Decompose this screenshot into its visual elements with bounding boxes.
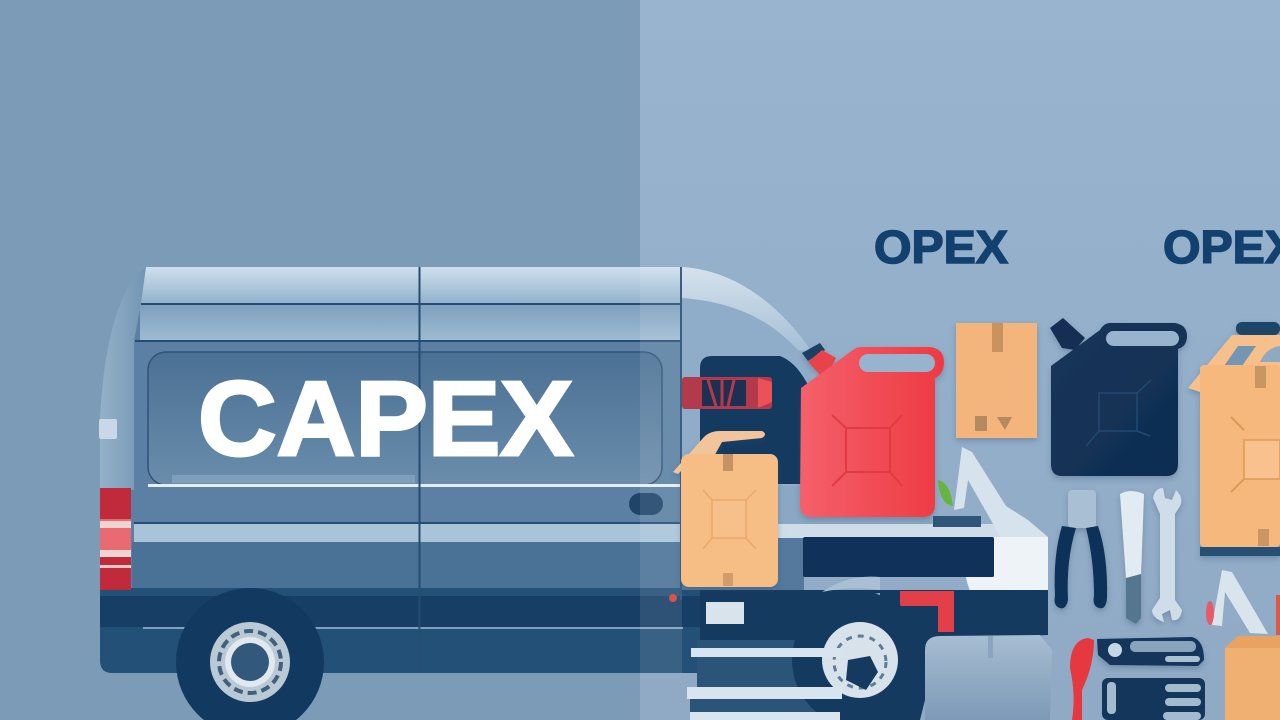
- van side window: [148, 352, 662, 485]
- van illustration: [99, 267, 1048, 720]
- white hood panel: [966, 537, 1048, 598]
- side mirror glitch: [682, 377, 772, 409]
- window chrome strip: [148, 484, 682, 487]
- window sill highlight: [172, 475, 415, 483]
- dark bumper: [803, 537, 994, 577]
- cab lower panel: [682, 538, 804, 590]
- van roof band: [141, 267, 680, 303]
- small marker: [669, 594, 677, 602]
- red front light: [900, 591, 954, 632]
- tool bars: [687, 648, 842, 720]
- bracket block: [706, 602, 744, 624]
- icon: dark folding knife: [1097, 637, 1204, 666]
- van sill: [100, 588, 700, 673]
- icon: folding tool right: [1206, 570, 1268, 634]
- van upper band: [140, 305, 680, 341]
- van light side stripe: [134, 524, 694, 542]
- lower front shadow area: [697, 640, 840, 692]
- green leaf: [938, 480, 953, 506]
- rear wheel: [176, 588, 324, 720]
- panel lines: [134, 267, 681, 672]
- van rear pillar: [100, 267, 146, 490]
- fender arc: [837, 593, 880, 617]
- icon: grey box: [925, 635, 1052, 720]
- panel: right OPEX background: [640, 0, 1280, 720]
- cab panel with roof curve: [682, 267, 812, 524]
- front wheel: [792, 592, 928, 720]
- cab window: [700, 356, 808, 484]
- icon: pliers: [1055, 490, 1107, 608]
- van rear body: [100, 267, 682, 673]
- icon: orange jerry can small: [673, 431, 778, 587]
- front fender highlight: [822, 577, 880, 592]
- cab roof highlight: [682, 267, 812, 352]
- sill dark band: [100, 596, 700, 627]
- panel: left CAPEX background: [0, 0, 640, 720]
- cab lower body: [682, 486, 932, 524]
- icon: navy jerry can: [1050, 318, 1187, 476]
- icon: orange box bottom right: [1225, 595, 1280, 720]
- icon: red tool handle: [1070, 638, 1094, 720]
- light sill: [682, 524, 1002, 538]
- icon: utility knife: [1120, 491, 1144, 624]
- dark lower front: [700, 590, 1048, 720]
- tail light: [100, 488, 131, 590]
- icon: cardboard box: [956, 323, 1037, 438]
- lighter overlay on van right half: [640, 267, 682, 673]
- sill light line: [143, 627, 683, 629]
- heading: OPEX first: OPEX: [874, 221, 1008, 273]
- van lower panel: [132, 542, 682, 588]
- door handle: [629, 493, 663, 515]
- CAPEX label on van: CAPEX: [198, 360, 573, 478]
- rear door hinge: [99, 419, 117, 439]
- icon: wrench: [1152, 488, 1182, 622]
- lower front shadow strip: [690, 699, 840, 712]
- dark step at bracket foot: [933, 516, 981, 527]
- icon: large orange jerry can: [1188, 322, 1280, 556]
- icon: red jerry can: [800, 343, 944, 517]
- icon: dark multi tool: [1102, 678, 1205, 720]
- folded white bracket: [954, 447, 1048, 537]
